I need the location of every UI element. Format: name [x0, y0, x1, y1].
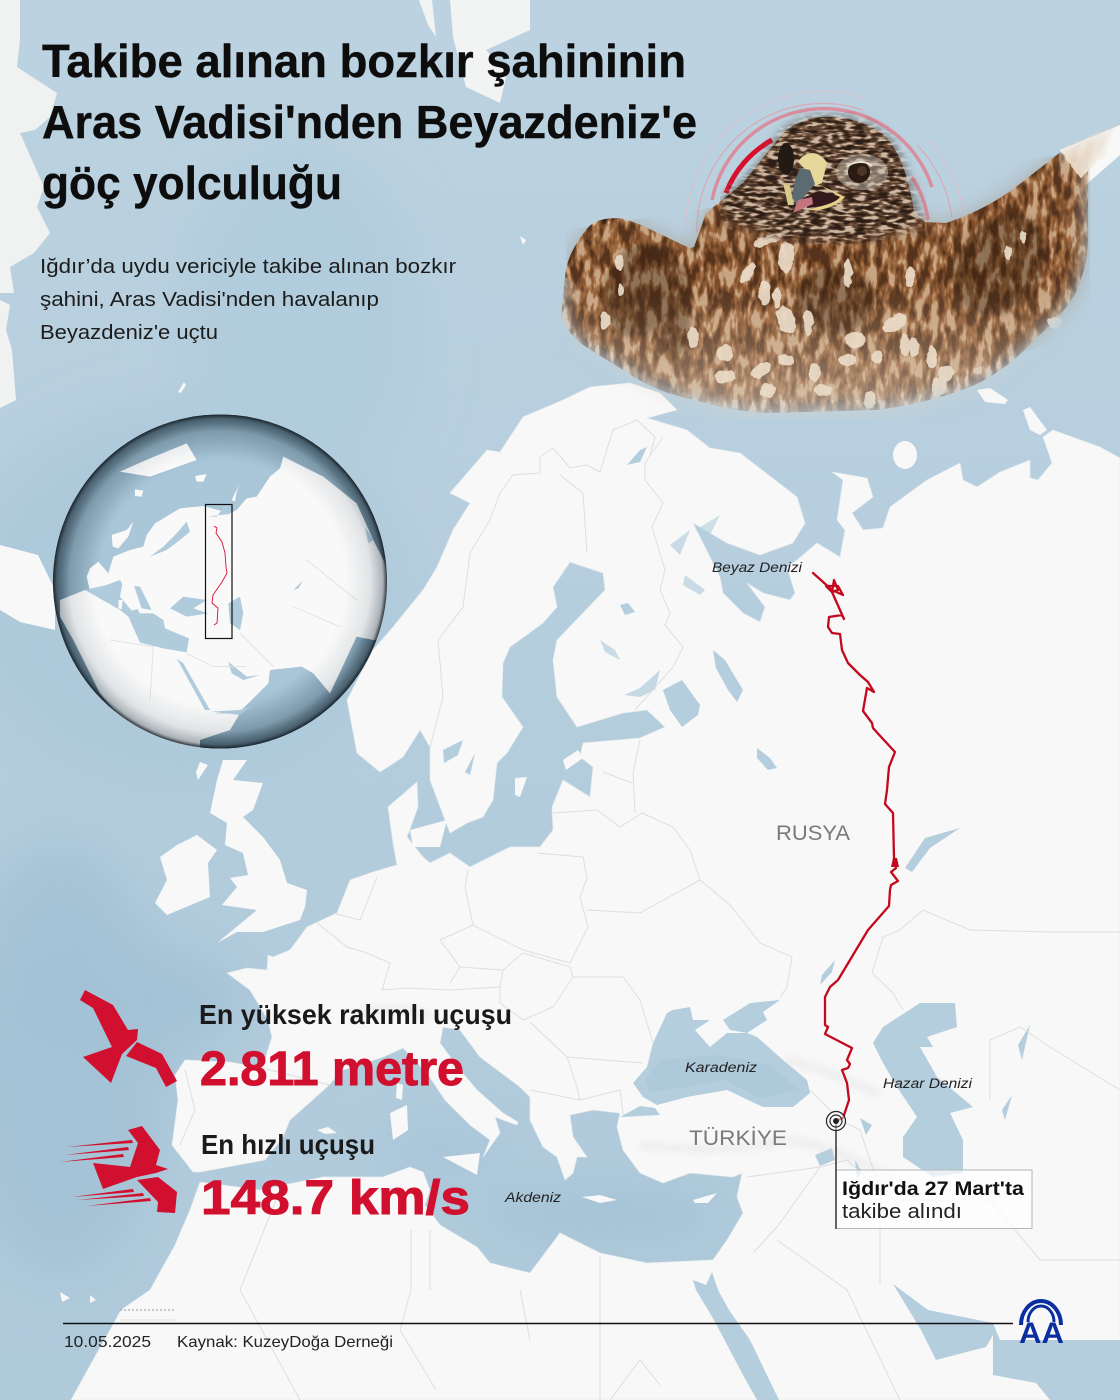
AA agency logo: AA — [1019, 1317, 1064, 1350]
radar rings behind bird — [686, 91, 963, 240]
icon: fast bird with speed lines — [60, 1126, 177, 1213]
cream feather spots — [600, 123, 1117, 409]
stat: highest altitude — [199, 999, 512, 1096]
subtitle text: şahini, Aras Vadisi'nden havalanıp — [40, 289, 379, 311]
label: Hazar Denizi: Hazar Denizi — [883, 1076, 973, 1091]
mountain shading — [355, 1010, 960, 1225]
dark plumage — [602, 213, 1047, 360]
title: Aras Vadisi'nden Beyazdeniz'e — [42, 96, 697, 148]
title: göç yolculuğu — [42, 157, 342, 209]
subtitle text: Beyazdeniz'e uçtu — [40, 322, 218, 344]
lower pale fade — [567, 298, 1064, 416]
globe land — [60, 457, 407, 753]
globe shading — [53, 414, 387, 748]
beak — [783, 153, 845, 213]
stat: fastest flight: En hızlı uçuşu — [201, 1129, 375, 1160]
label: Akdeniz: Akdeniz — [504, 1190, 561, 1205]
seas and lakes — [443, 447, 1120, 1400]
label: Türkiye: TÜRKİYE — [689, 1127, 787, 1150]
subtitle text: Iğdır’da uydu vericiyle takibe alınan bozkır — [40, 256, 456, 278]
map labels — [504, 560, 973, 1205]
AA agency logo — [1019, 1301, 1064, 1350]
label: Karadeniz: Karadeniz — [685, 1060, 757, 1075]
stat: fastest flight — [201, 1129, 470, 1225]
stat: highest altitude: En yüksek rakımlı uçuşu — [199, 999, 512, 1030]
globe seas — [85, 503, 373, 715]
bird head — [720, 112, 925, 244]
warm brown tint — [565, 150, 1090, 400]
bird body texture — [561, 117, 1117, 413]
mini route — [212, 526, 227, 625]
migration route — [813, 573, 898, 1121]
footer: Kaynak: KuzeyDoğa Derneği — [177, 1334, 393, 1351]
callout: Iğdır start point: Iğdır'da 27 Mart'ta — [842, 1179, 1024, 1200]
left eye — [778, 143, 794, 175]
stat: highest altitude: 2.811 metre — [200, 1043, 464, 1096]
face pale patch — [836, 154, 888, 190]
country borders — [120, 420, 1120, 1400]
title — [42, 35, 697, 209]
label: Beyaz Denizi: Beyaz Denizi — [712, 560, 803, 575]
icon: soaring bird — [80, 990, 177, 1087]
callout: Iğdır start point — [826, 1112, 1032, 1229]
globe borders — [110, 560, 357, 700]
right eye — [847, 161, 872, 183]
label: Rusya: RUSYA — [776, 822, 850, 845]
footer: 10.05.2025 — [64, 1334, 151, 1351]
steppe eagle photo — [555, 112, 1117, 420]
locator globe — [53, 414, 407, 753]
footer — [63, 1324, 1013, 1351]
title: Takibe alınan bozkır şahininin — [42, 35, 686, 87]
globe locator frame — [206, 504, 232, 638]
subtitle text — [40, 256, 456, 344]
callout: Iğdır start point: takibe alındı — [842, 1201, 962, 1223]
stat: fastest flight: 148.7 km/s — [201, 1172, 470, 1225]
route blob — [891, 858, 899, 867]
land: Eurasia and Africa — [71, 383, 1120, 1400]
